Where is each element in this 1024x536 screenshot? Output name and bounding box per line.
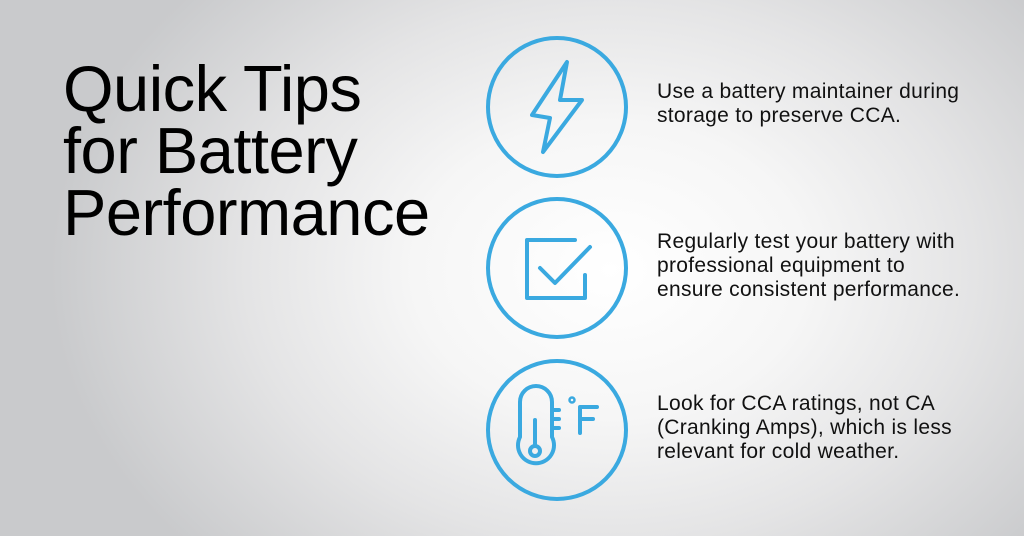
tip 2 text: professional equipment to [657,254,905,277]
icon: lightning [488,38,626,176]
icon: thermometer [488,361,626,499]
tip 1 text: storage to preserve CCA. [657,104,901,127]
tip 3 text: (Cranking Amps), which is less [657,416,952,439]
tip 3 text: Look for CCA ratings, not CA [657,392,935,415]
icon: checkbox [488,199,626,337]
tip 1 text: Use a battery maintainer during [657,80,959,103]
title: Performance [63,176,430,249]
title: for Battery [63,114,357,187]
tip 2 text [657,230,960,301]
tip 2 text: ensure consistent performance. [657,278,960,301]
title [63,52,430,249]
title: Quick Tips [63,52,361,125]
tip 2 text: Regularly test your battery with [657,230,955,253]
tip 3 text [657,392,952,463]
tip 1 text [657,80,959,127]
tip 3 text: relevant for cold weather. [657,440,899,463]
